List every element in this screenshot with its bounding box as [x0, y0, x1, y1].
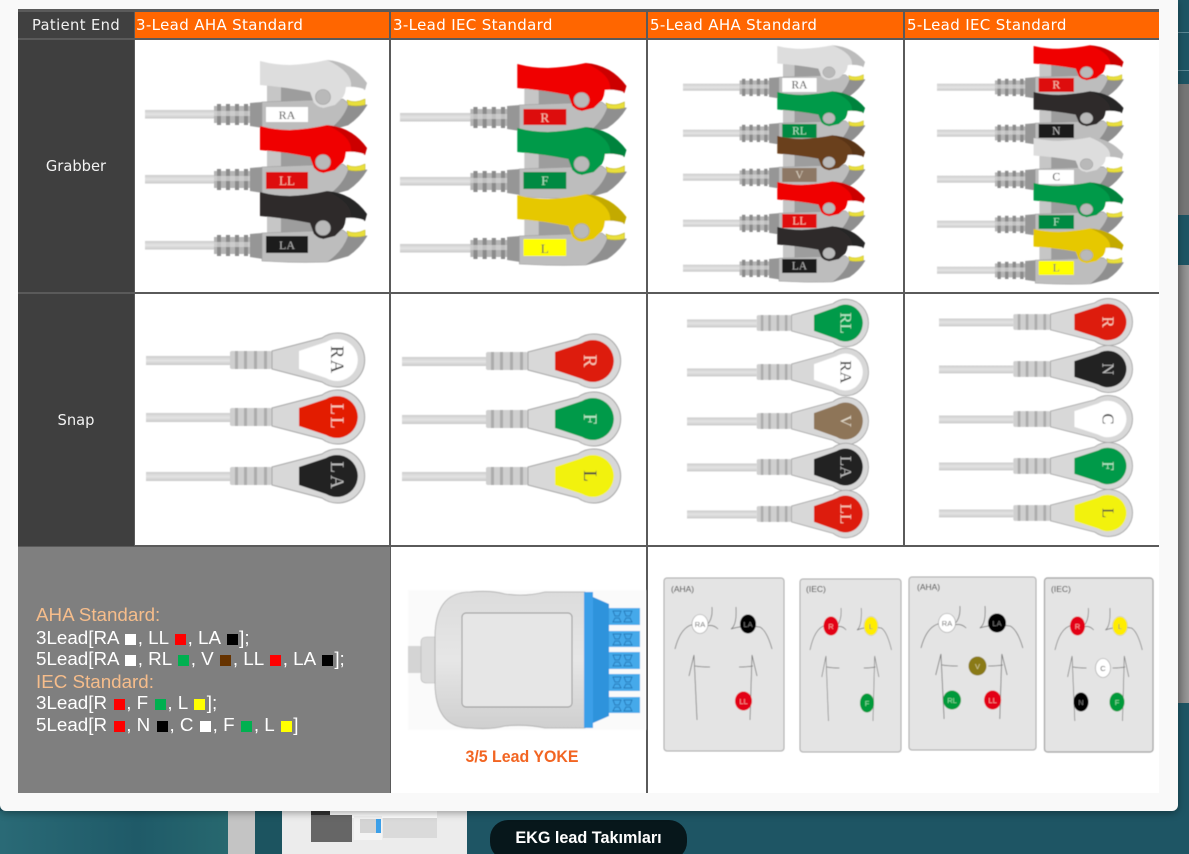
body diagram: 5-lead AHA: (AHA) — [917, 582, 940, 592]
clamp C — [937, 137, 1123, 193]
electrode L — [1112, 616, 1128, 636]
snap LA: LA — [326, 461, 347, 491]
electrode LL — [735, 692, 752, 710]
electrode RL — [943, 690, 961, 710]
clamp F — [937, 182, 1123, 238]
electrode R — [824, 616, 838, 636]
header: 3-Lead AHA Standard: 3-Lead AHA Standard — [136, 16, 303, 34]
electrode L: L — [1118, 622, 1122, 631]
electrode LL: LL — [739, 697, 748, 706]
snap V — [687, 397, 868, 445]
clamp V — [683, 135, 865, 191]
snap N: N — [1099, 363, 1118, 375]
snap F: F — [579, 414, 600, 424]
snap F: F — [1099, 461, 1118, 471]
snap N — [939, 346, 1133, 392]
snap F — [402, 392, 621, 446]
electrode LA — [988, 614, 1006, 632]
electrode F: F — [1115, 698, 1120, 707]
row heading: Grabber — [18, 40, 134, 292]
snap L: L — [579, 470, 600, 482]
header: 3-Lead IEC Standard: 3-Lead IEC Standard — [393, 16, 553, 34]
snap RA: RA — [837, 360, 854, 384]
clamp F — [400, 127, 626, 198]
electrode N: N — [1078, 698, 1084, 707]
clamp C: C — [1052, 171, 1060, 184]
electrode L: L — [869, 622, 873, 631]
electrode N — [1074, 692, 1088, 712]
body diagram: 5-lead AHA — [909, 577, 1036, 750]
snap R — [402, 334, 621, 388]
clamp RA: RA — [791, 80, 808, 92]
snap RA — [146, 333, 365, 387]
snap R: R — [1099, 316, 1118, 328]
electrode L — [864, 616, 878, 636]
electrode LA: LA — [743, 620, 753, 629]
yoke caption: 3/5 Lead YOKE — [466, 748, 578, 766]
snap connectors: 3-Lead IEC — [402, 334, 621, 503]
electrode RA — [938, 614, 956, 632]
row heading: Snap — [18, 294, 134, 546]
grabber clamps: 5-Lead AHA — [683, 45, 865, 282]
snap RA: RA — [326, 346, 347, 374]
yoke connector illustration — [408, 590, 646, 730]
legend panel: lead colour standards — [18, 547, 390, 793]
electrode F — [1110, 692, 1124, 712]
clamp LL: LL — [279, 173, 295, 188]
electrode RL: RL — [947, 696, 957, 705]
snap C: C — [1099, 413, 1118, 425]
electrode R: R — [828, 622, 834, 631]
snap L — [402, 449, 621, 503]
clamp LA: LA — [792, 261, 808, 273]
legend text: 5Lead[R , N , C , F , L ] — [36, 714, 298, 735]
clamp F: F — [1053, 216, 1060, 229]
clamp R: R — [540, 110, 550, 125]
header: Patient End: Patient End — [32, 17, 120, 34]
snap LA — [687, 443, 868, 491]
header: 3-Lead IEC Standard — [391, 12, 646, 38]
electrode V: V — [975, 662, 980, 671]
legend text: 3Lead[R , F , L ]; — [36, 692, 217, 713]
snap F — [939, 443, 1133, 489]
legend text: 3Lead[RA , LL , LA ]; — [36, 627, 250, 648]
electrode F — [860, 694, 874, 712]
body diagram: 3-lead IEC: (IEC) — [806, 584, 826, 594]
body diagram: 3-lead IEC — [800, 579, 901, 752]
clamp F: F — [541, 173, 549, 188]
snap V: V — [837, 415, 854, 427]
clamp L: L — [541, 241, 549, 256]
clamp LL — [145, 125, 367, 196]
snap LL: LL — [837, 504, 854, 524]
clamp R — [400, 63, 626, 134]
snap L: L — [1099, 508, 1118, 518]
electrode LL: LL — [988, 696, 997, 705]
grabber clamps: 3-Lead IEC — [400, 63, 626, 265]
legend text — [36, 604, 345, 735]
clamp LA — [683, 226, 865, 282]
snap LL — [687, 490, 868, 538]
header: 5-Lead IEC Standard — [905, 12, 1159, 38]
electrode RA: RA — [942, 619, 952, 628]
body diagram: 5-lead IEC: (IEC) — [1051, 584, 1071, 594]
snap L — [939, 490, 1133, 536]
snap R — [939, 299, 1133, 345]
electrode C: C — [1100, 664, 1106, 673]
snap connectors: 5-Lead AHA — [687, 299, 868, 538]
clamp RA: RA — [279, 108, 296, 122]
clamp L: L — [1053, 262, 1060, 275]
body diagram: 5-lead IEC — [1044, 578, 1153, 752]
clamp RL: RL — [792, 126, 807, 138]
clamp L — [937, 228, 1123, 284]
electrode V — [968, 656, 986, 676]
header: Patient End — [18, 12, 134, 38]
row heading: Grabber: Grabber — [46, 158, 106, 175]
snap C — [939, 396, 1133, 442]
clamp RL — [683, 91, 865, 147]
clamp LA — [145, 191, 367, 262]
snap RL: RL — [837, 312, 854, 334]
clamp N — [937, 91, 1123, 147]
electrode RA: RA — [695, 620, 705, 629]
clamp R: R — [1052, 79, 1060, 92]
snap LL — [146, 390, 365, 444]
snap RL — [687, 299, 868, 347]
snap LA: LA — [837, 456, 854, 478]
snap connectors: 3-Lead AHA — [146, 333, 365, 503]
clamp V: V — [795, 170, 804, 182]
snap LA — [146, 449, 365, 503]
body diagram: 3-lead AHA — [664, 578, 784, 751]
row heading: Snap: Snap — [58, 412, 94, 429]
electrode C — [1096, 658, 1110, 678]
legend text: AHA Standard: — [36, 604, 160, 625]
clamp N: N — [1052, 125, 1061, 138]
electrode LA: LA — [992, 619, 1002, 628]
electrode F: F — [865, 699, 870, 708]
clamp LL: LL — [792, 216, 806, 228]
bottom button: EKG lead Takımları: EKG lead Takımları — [515, 829, 662, 847]
clamp R — [937, 45, 1123, 101]
electrode LL — [984, 690, 1001, 710]
legend text: IEC Standard: — [36, 671, 154, 692]
header: 5-Lead IEC Standard: 5-Lead IEC Standard — [907, 16, 1067, 34]
electrode LA — [740, 614, 756, 634]
clamp RA — [683, 45, 865, 101]
electrode R: R — [1075, 622, 1081, 631]
snap connectors: 5-Lead IEC — [939, 299, 1133, 536]
header: 5-Lead AHA Standard: 5-Lead AHA Standard — [650, 16, 817, 34]
header: 3-Lead AHA Standard — [135, 12, 389, 38]
legend text: 5Lead[RA , RL , V , LL , LA ]; — [36, 648, 345, 669]
clamp LA: LA — [279, 238, 295, 252]
body diagram: 3-lead AHA: (AHA) — [671, 584, 694, 594]
electrode R — [1070, 616, 1085, 636]
electrode RA — [692, 614, 708, 634]
clamp RA — [145, 60, 367, 131]
grabber clamps: 3-Lead AHA — [145, 60, 367, 262]
grabber clamps: 5-Lead IEC — [937, 45, 1123, 284]
clamp L — [400, 194, 626, 265]
header: 5-Lead AHA Standard — [648, 12, 903, 38]
clamp LL — [683, 181, 865, 237]
snap RA — [687, 348, 868, 396]
snap LL: LL — [326, 403, 347, 431]
snap R: R — [579, 355, 600, 368]
